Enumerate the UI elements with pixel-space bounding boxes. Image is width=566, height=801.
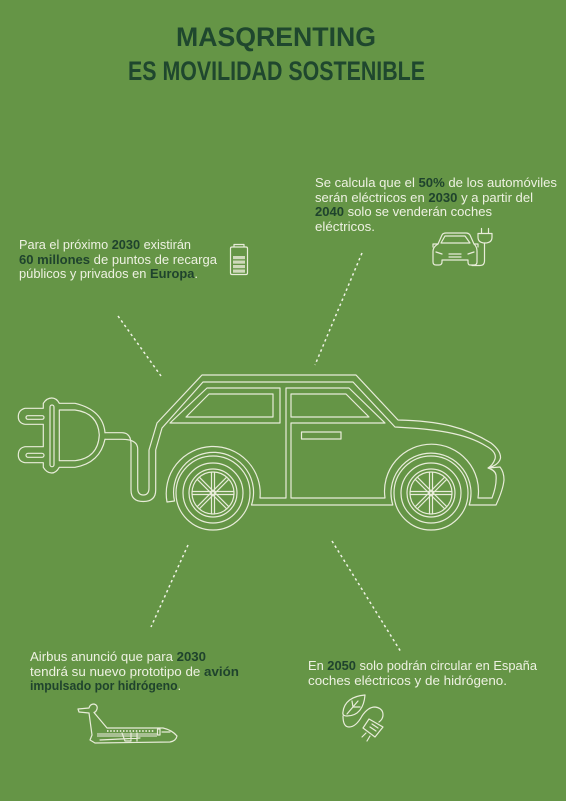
text block: 2050 Spain: En 2050 solo podrán circular en España — [308, 659, 537, 673]
text block: Airbus hydrogen plane — [30, 650, 239, 693]
front wheel — [394, 456, 468, 530]
title: ES MOVILIDAD SOSTENIBLE — [128, 56, 425, 86]
text block: 2050 Spain — [308, 659, 537, 688]
icon: airplane — [78, 704, 177, 743]
text block: 2050 Spain: coches eléctricos y de hidrógeno. — [308, 674, 507, 688]
title — [128, 22, 425, 86]
icon: leaf with plug — [343, 695, 383, 741]
dotted connector: bottom right — [332, 541, 401, 652]
title: MASQRENTING — [176, 22, 376, 52]
illustration: electric car with plug cord — [18, 375, 504, 530]
rear window — [170, 388, 280, 423]
text block: 50% of cars electric by 2030: 2040 solo se venderán coches — [315, 205, 492, 219]
text block: charging points: públicos y privados en Europa. — [19, 267, 198, 281]
text block: 50% of cars electric by 2030: eléctricos. — [315, 220, 375, 234]
text block: charging points — [19, 238, 217, 281]
door handle — [302, 432, 341, 439]
body outline — [105, 375, 504, 505]
icon: battery — [230, 244, 248, 274]
text block: 50% of cars electric by 2030: Se calcula que el 50% de los automóviles — [315, 176, 557, 190]
text block: Airbus hydrogen plane: impulsado por hidrógeno. — [30, 679, 181, 693]
text block: charging points: 60 millones de puntos de recarga — [19, 253, 217, 267]
text block: charging points: Para el próximo 2030 existirán — [19, 238, 191, 252]
dotted connector: top right — [315, 253, 362, 365]
dotted connector: bottom left — [151, 545, 188, 627]
plug — [18, 398, 105, 473]
text block: 50% of cars electric by 2030: serán eléctricos en 2030 y a partir del — [315, 191, 533, 205]
rear wheel — [176, 456, 250, 530]
front window — [291, 394, 369, 417]
dotted connector: top left — [118, 316, 161, 376]
text block: 50% of cars electric by 2030 — [315, 176, 557, 234]
icon: electric car with plug — [433, 228, 492, 266]
text block: Airbus hydrogen plane: Airbus anunció que para 2030 — [30, 650, 206, 664]
text block: Airbus hydrogen plane: tendrá su nuevo prototipo de avión — [30, 665, 239, 679]
